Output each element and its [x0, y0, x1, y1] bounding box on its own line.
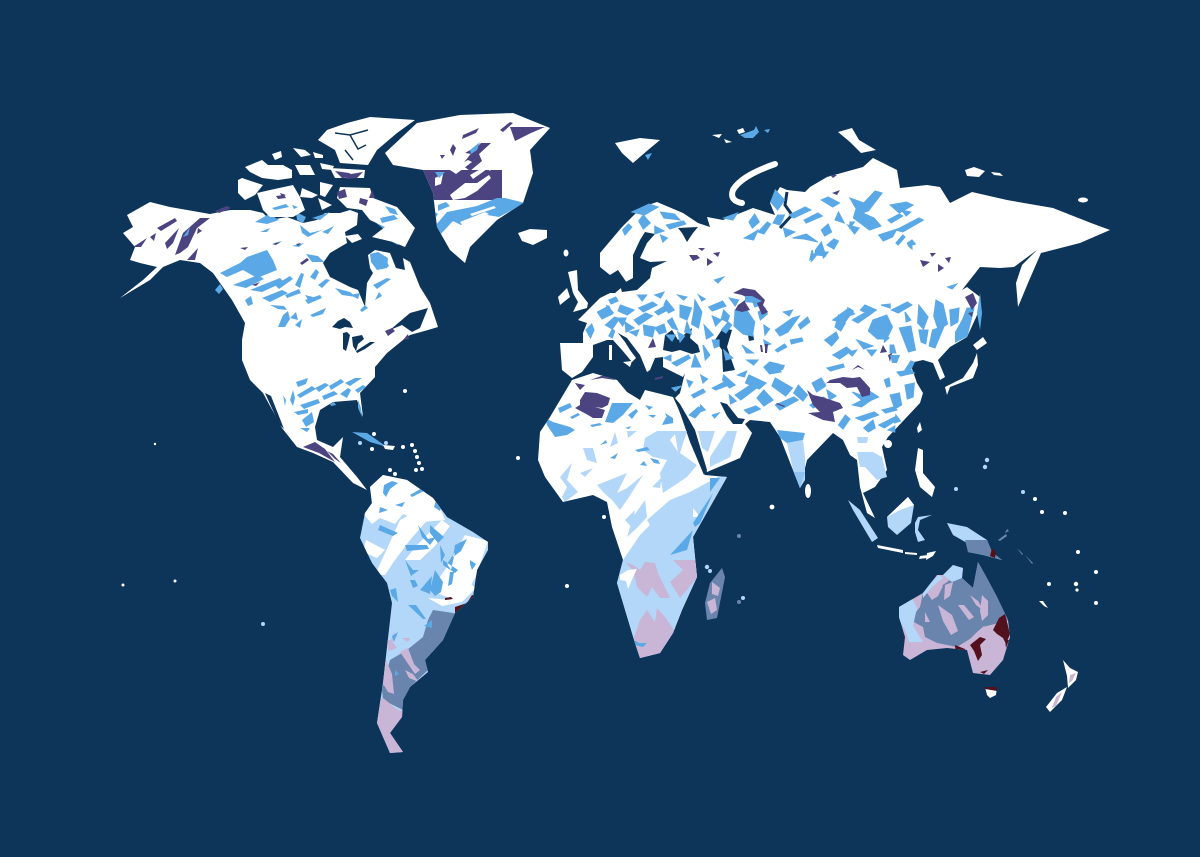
- purple patch: Kazakhstan: [733, 288, 768, 315]
- slate of New Guinea south: [965, 540, 1002, 560]
- Hispaniola: [383, 445, 395, 450]
- Black Sea: [663, 328, 700, 354]
- light blue: Indochina: [857, 437, 887, 480]
- white strip near Rio: [428, 584, 474, 606]
- Red Sea: [675, 398, 707, 475]
- Great Lakes: [332, 318, 375, 353]
- landmass: Eurasia: [560, 158, 1110, 518]
- Africa: [538, 373, 730, 670]
- island dots: [122, 250, 1098, 608]
- slate island dots: [737, 534, 741, 604]
- world map: [120, 113, 1110, 753]
- island: Tasmania: [985, 687, 997, 698]
- coloured regions of Australia: [895, 560, 1010, 674]
- lavender tip and streaks: [377, 630, 436, 753]
- blue inset: Kazakhstan: [745, 296, 762, 303]
- purple triangles: Siberia west and east: [689, 175, 951, 272]
- blue band: [432, 142, 525, 236]
- Madagascar: [705, 568, 725, 620]
- Caspian Sea: [715, 328, 735, 372]
- blue shards: Scandinavia and Kola: [623, 204, 686, 242]
- Tasmania: [985, 687, 997, 698]
- blue strip on Namibia coast: [634, 640, 647, 647]
- Sicily: [623, 361, 632, 367]
- New Guinea: [947, 523, 1002, 560]
- smaller northern islands: [245, 148, 365, 180]
- Hainan: [884, 440, 892, 448]
- Southeast Asia islands: [805, 422, 1033, 564]
- European islands: [558, 270, 632, 367]
- Severnaya Zemlya: [838, 128, 876, 153]
- Eurasia: [560, 158, 1110, 518]
- maroon spot New Guinea: [990, 548, 996, 558]
- North Island: [1063, 660, 1078, 688]
- White Sea: [678, 227, 698, 242]
- purple patches: Tibet and Himalaya: [648, 293, 977, 422]
- light blue: Arabia: [710, 431, 737, 467]
- purple patches: Sahara: [575, 373, 615, 418]
- lavender patches: [625, 560, 697, 658]
- Borneo: [887, 497, 914, 535]
- Sri Lanka: [805, 484, 811, 498]
- slate south: [382, 610, 460, 710]
- Arctic archipelagos: [615, 126, 1088, 203]
- Aral Sea: [748, 333, 754, 341]
- light-blue island dots: [261, 441, 1025, 626]
- Baffin Island: [337, 187, 415, 247]
- Franz Josef Land: [712, 128, 745, 143]
- Corsica and Sardinia: [609, 345, 612, 360]
- Philippines: [915, 448, 935, 497]
- blue shards: northern Siberia: [714, 190, 957, 289]
- purple shards: Great Lakes and Central America: [240, 242, 409, 463]
- blue shards: Middle East to South Asia band: [655, 361, 914, 432]
- Ellesmere Island: [318, 117, 415, 165]
- blue shards: Canada: [215, 212, 406, 328]
- Ellesmere channels: [335, 130, 368, 160]
- blue inset on Alaska: [183, 227, 190, 237]
- Southampton Island: [345, 234, 362, 243]
- Persian Gulf: [720, 402, 745, 424]
- Sumatra: [848, 500, 878, 542]
- Gulf of California: [265, 393, 284, 429]
- lavender patches on Madagascar: [707, 582, 720, 614]
- Prince of Wales and Somerset: [300, 182, 333, 210]
- South America: [360, 470, 488, 760]
- landmass: Greenland: [385, 113, 550, 263]
- Canadian Arctic islands: [238, 117, 415, 247]
- light blue northwest: [895, 575, 943, 642]
- maroon drought patches: [955, 614, 1010, 674]
- light blue south: [617, 476, 727, 658]
- coloured regions of South America: [360, 470, 488, 760]
- landmass: Africa: [538, 373, 727, 658]
- North America: [120, 180, 438, 490]
- purple shards: Alaska and Yukon: [133, 180, 240, 260]
- Caribbean islands: [352, 432, 395, 450]
- Australia: [895, 560, 1010, 675]
- lavender streaks on New Zealand: [1052, 673, 1076, 708]
- Wrangel: [1078, 198, 1088, 202]
- Hokkaido: [973, 337, 987, 350]
- maroon patch: southeast Brazil: [445, 595, 475, 613]
- slate interior: [910, 560, 1010, 647]
- blue shards: China to Far East band: [825, 300, 974, 371]
- white patches: [360, 470, 488, 600]
- New Zealand: [1046, 660, 1078, 712]
- blue shards: [378, 481, 476, 676]
- purple block: [423, 122, 545, 200]
- blue shards: southern United States and Mexico: [283, 378, 366, 432]
- blue shards: Europe to Central Asia band: [586, 292, 810, 377]
- Greenland: [385, 113, 550, 263]
- coloured regions of Africa: [545, 373, 730, 670]
- Solomon Islands and Bismarck: [998, 529, 1033, 564]
- blue shards: Scandinavia to Siberia, Europe to East Asia: [586, 190, 974, 432]
- Svalbard blue fleck: [645, 153, 652, 160]
- white cut on southwest: [620, 569, 637, 589]
- New Siberian Islands: [965, 167, 1003, 177]
- landmass: South America: [360, 475, 488, 753]
- Sakhalin: [977, 293, 982, 330]
- island: Madagascar: [705, 568, 725, 620]
- Victoria Island: [257, 185, 305, 217]
- landmass: Australia: [899, 562, 1010, 675]
- Cuba: [352, 432, 387, 447]
- light blue shards: central Africa: [560, 431, 697, 537]
- white cut in south: [693, 508, 698, 517]
- light blue Arnhem: [943, 565, 963, 582]
- Taiwan: [917, 422, 922, 433]
- lavender streaks: [925, 582, 988, 640]
- Sulawesi: [915, 515, 932, 542]
- South Island: [1046, 687, 1067, 712]
- white top of Borneo: [887, 497, 914, 517]
- Franz Josef Land blue: [740, 126, 770, 138]
- Arctic island shards: [276, 171, 375, 206]
- Java and Lesser Sunda: [877, 545, 936, 560]
- white shards: [435, 160, 495, 200]
- coloured ice patches: [423, 122, 545, 238]
- Novaya Zemlya: [732, 164, 775, 203]
- Japan and Sakhalin: [945, 293, 987, 395]
- landmass: North American mainland: [120, 202, 438, 490]
- Banks Island: [238, 178, 263, 200]
- white cuts in the blue band: [450, 206, 496, 225]
- blue shards: Sahara and Sahel: [545, 390, 720, 555]
- Great Britain: [568, 270, 588, 312]
- Ireland: [558, 288, 570, 305]
- Iceland: [518, 229, 547, 245]
- Svalbard: [615, 138, 660, 163]
- Gulf of St Lawrence: [390, 308, 428, 332]
- blue patch: central China: [890, 355, 900, 363]
- Gulf of Ob: [780, 192, 792, 228]
- blue patch: Tarim: [773, 363, 785, 370]
- Baltic Sea: [620, 232, 667, 292]
- maroon patch on Tasmania: [985, 687, 997, 691]
- Honshu and Kyushu: [945, 353, 978, 395]
- light blue: Arabia northwest: [698, 431, 715, 452]
- slate spot south: [960, 655, 968, 664]
- blue cap and light blue: India: [777, 430, 805, 443]
